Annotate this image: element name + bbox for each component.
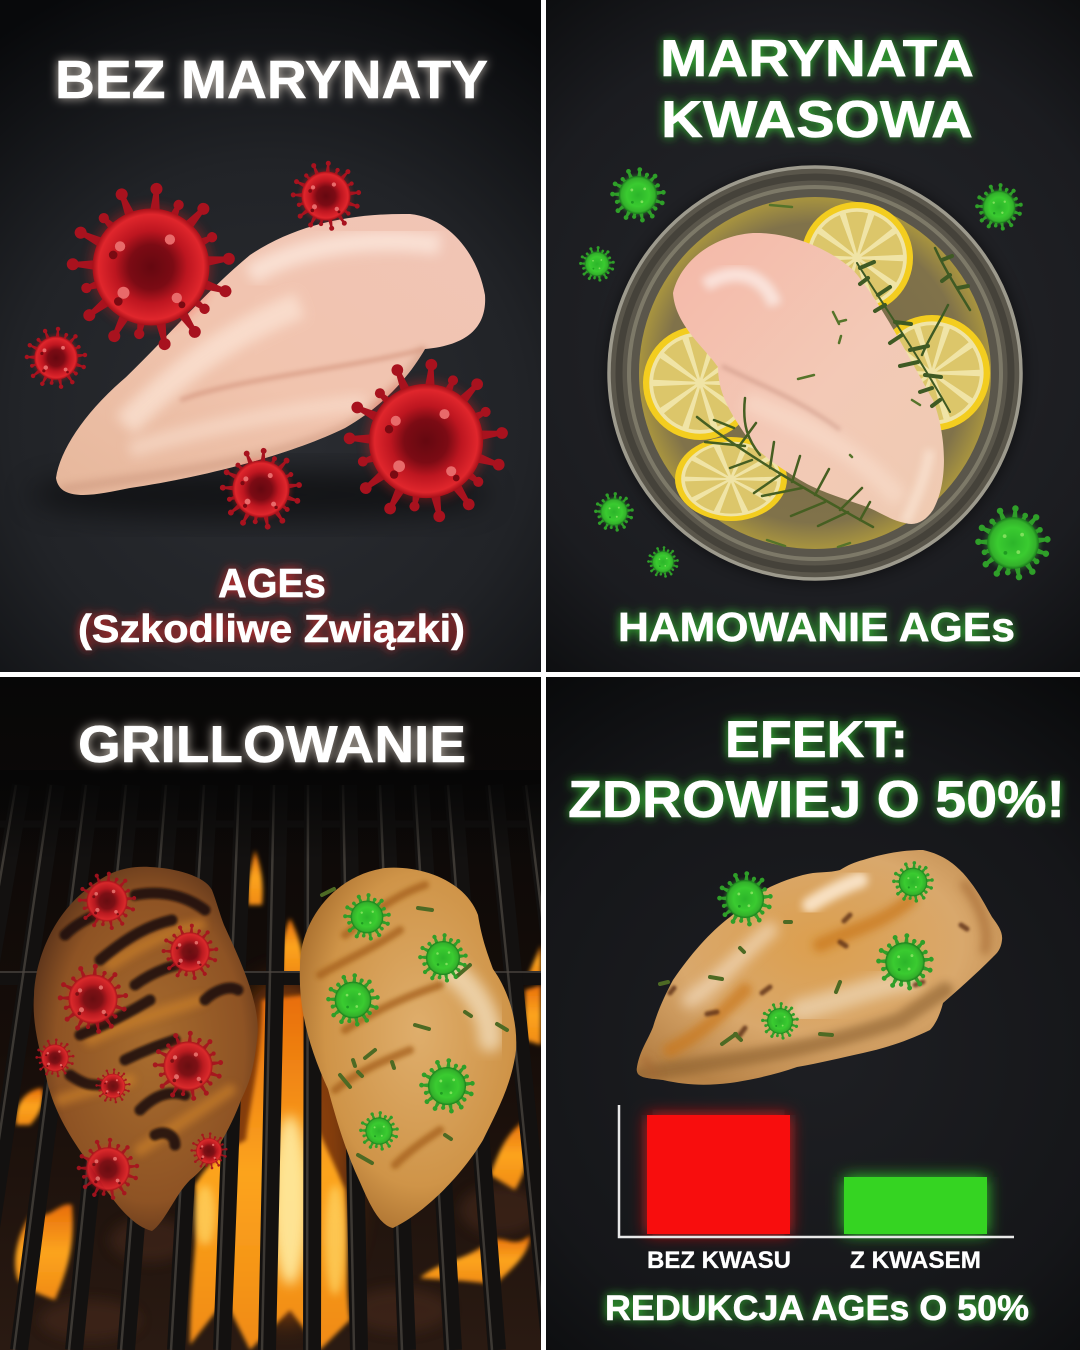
label: z kwasem: Z KWASEM [850,1247,981,1274]
title: KWASOWA [661,91,973,149]
icon: green virus top right [975,183,1023,230]
icon: green virus bottom left [594,492,634,532]
illustration: raw chicken breast [56,214,485,495]
title [568,711,1065,829]
icon: green virus top left [611,167,665,222]
icon: green virus bottom right [976,506,1050,580]
title: GRILLOWANIE [78,716,466,774]
rosemary sprig [697,398,873,527]
illustration: marinated grilled chicken breast [300,868,516,1228]
icon: large red virus top left [67,183,235,351]
icon: green virus left [579,246,615,282]
herb specks [767,205,920,547]
lemon slices [643,202,990,521]
title: MARYNATA [660,30,974,88]
title [660,30,974,149]
icon: green virus bottom [647,546,679,578]
coals [42,1184,530,1340]
grill grate [0,790,541,1350]
icon: red virus left [25,327,87,389]
bar: z kwasem [844,1177,987,1234]
panel: efekt [546,677,1080,1350]
panel: marynata kwasowa [546,0,1080,672]
caption: hamowanie AGEs: HAMOWANIE AGEs [618,604,1015,650]
icon: large red virus right [344,358,508,523]
axes [619,1105,1014,1237]
illustration: glass bowl with marinade [606,164,1026,584]
icons: green viruses on marinated chicken [326,893,474,1151]
icons: green viruses on chicken [718,861,934,1040]
flames [15,850,541,1350]
title: EFEKT: [725,711,908,769]
illustration: burnt chicken breast [34,867,258,1231]
title: BEZ MARYNATY [55,50,488,110]
raw chicken in marinade [673,233,944,524]
panel: bez marynaty [0,0,541,672]
caption: redukcja AGEs: REDUKCJA AGEs O 50% [605,1289,1029,1328]
icons: red viruses on burnt chicken [35,872,228,1200]
caption: AGEs: (Szkodliwe Związki) [78,608,465,651]
icon: red virus top [291,161,361,231]
title: ZDROWIEJ O 50%! [568,771,1065,829]
illustration: marinated cooked chicken [637,850,1002,1085]
label: bez kwasu: BEZ KWASU [647,1247,791,1274]
bar: bez kwasu [647,1115,790,1234]
caption: AGEs: AGEs [218,560,326,606]
thyme sprigs [857,248,970,412]
caption: AGEs [78,560,465,651]
icon: red virus bottom [220,448,302,530]
bar chart [619,1105,1014,1274]
panel: grillowanie [0,677,600,1350]
